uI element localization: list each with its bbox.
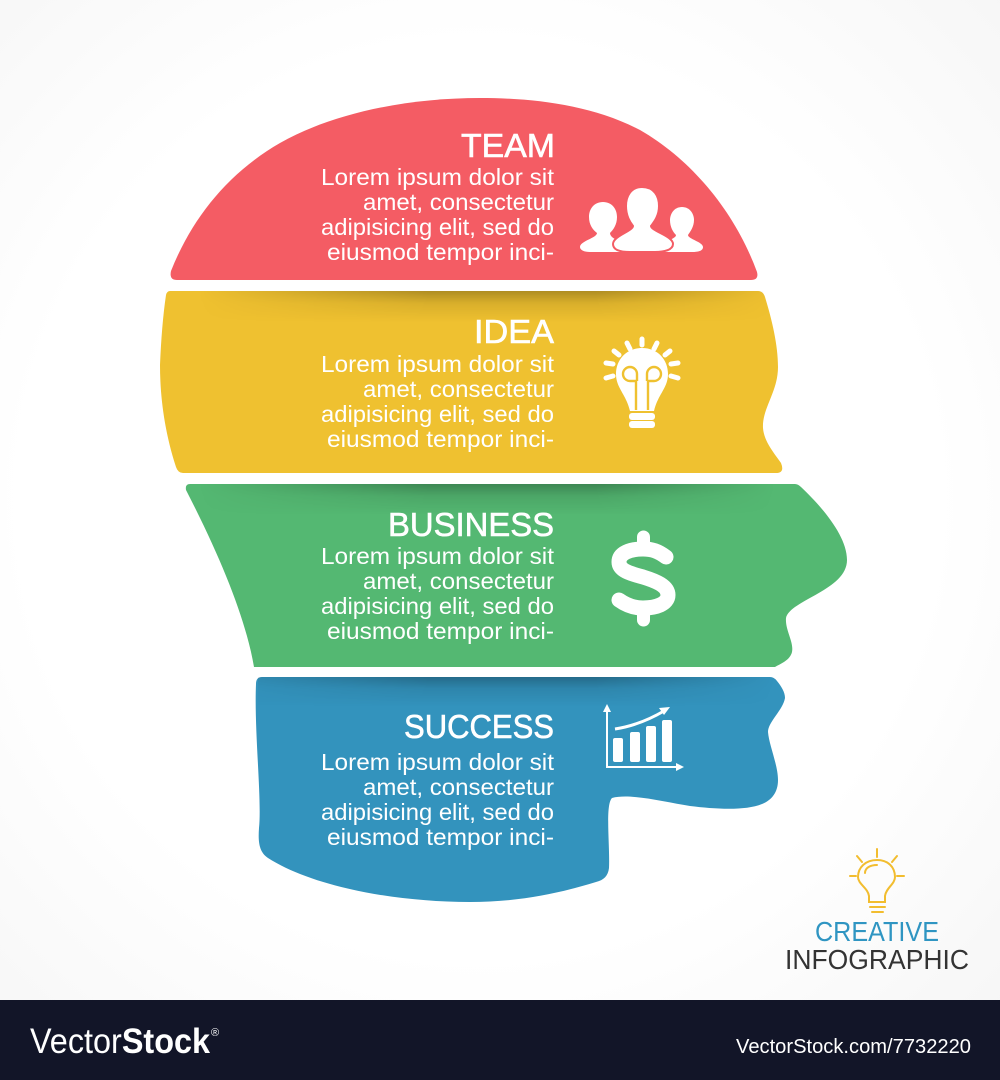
red head segment xyxy=(171,98,757,280)
text block: business xyxy=(321,543,555,644)
text block: business: eiusmod tempor inci- xyxy=(327,618,554,644)
panel: team xyxy=(171,98,757,280)
icon: dollar sign xyxy=(619,537,668,620)
footer url: VectorStock.com/7732220 xyxy=(736,1036,971,1058)
text block: success: adipisicing elit, sed do xyxy=(321,799,554,825)
footer bar xyxy=(0,1000,1000,1080)
icon: light bulb xyxy=(606,339,678,428)
panel: business xyxy=(186,484,847,667)
text: creative: CREATIVE xyxy=(815,916,939,947)
heading: idea: IDEA xyxy=(474,313,554,350)
green head segment xyxy=(186,484,847,667)
yellow head segment xyxy=(160,291,782,473)
text block: team: Lorem ipsum dolor sit xyxy=(321,164,555,190)
panel: success xyxy=(256,677,785,902)
text: infographic: INFOGRAPHIC xyxy=(785,944,969,975)
text block: idea: amet, consectetur xyxy=(363,376,554,402)
heading: team: TEAM xyxy=(461,127,555,164)
text block: business: adipisicing elit, sed do xyxy=(321,593,554,619)
text block: business: amet, consectetur xyxy=(363,568,554,594)
text block: team: eiusmod tempor inci- xyxy=(327,239,554,265)
footer background xyxy=(0,1000,1000,1080)
text block: idea xyxy=(321,351,555,452)
text block: success: amet, consectetur xyxy=(363,774,554,800)
registered mark: ® xyxy=(211,1027,219,1039)
footer logo: VectorStock xyxy=(30,1022,210,1061)
heading: business: BUSINESS xyxy=(388,506,554,543)
top shadow: idea xyxy=(226,291,752,315)
text block: business: Lorem ipsum dolor sit xyxy=(321,543,555,569)
text block: team: amet, consectetur xyxy=(363,189,554,215)
top shadow: success xyxy=(258,677,747,698)
text block: idea: eiusmod tempor inci- xyxy=(327,426,554,452)
text block: idea: Lorem ipsum dolor sit xyxy=(321,351,555,377)
text block: team: adipisicing elit, sed do xyxy=(321,214,554,240)
heading: success: SUCCESS xyxy=(404,708,554,745)
blue head segment xyxy=(256,677,785,902)
icon: growth chart xyxy=(603,704,684,771)
text block: team xyxy=(321,164,555,265)
panel: idea xyxy=(160,291,782,473)
logo: creative infographic xyxy=(785,849,969,975)
text block: success: eiusmod tempor inci- xyxy=(327,824,554,850)
text block: success: Lorem ipsum dolor sit xyxy=(321,749,555,775)
icon: team people xyxy=(580,187,703,252)
icon: outline bulb xyxy=(850,849,904,912)
text block: success xyxy=(321,749,555,850)
top shadow: business xyxy=(238,484,744,506)
text block: idea: adipisicing elit, sed do xyxy=(321,401,554,427)
